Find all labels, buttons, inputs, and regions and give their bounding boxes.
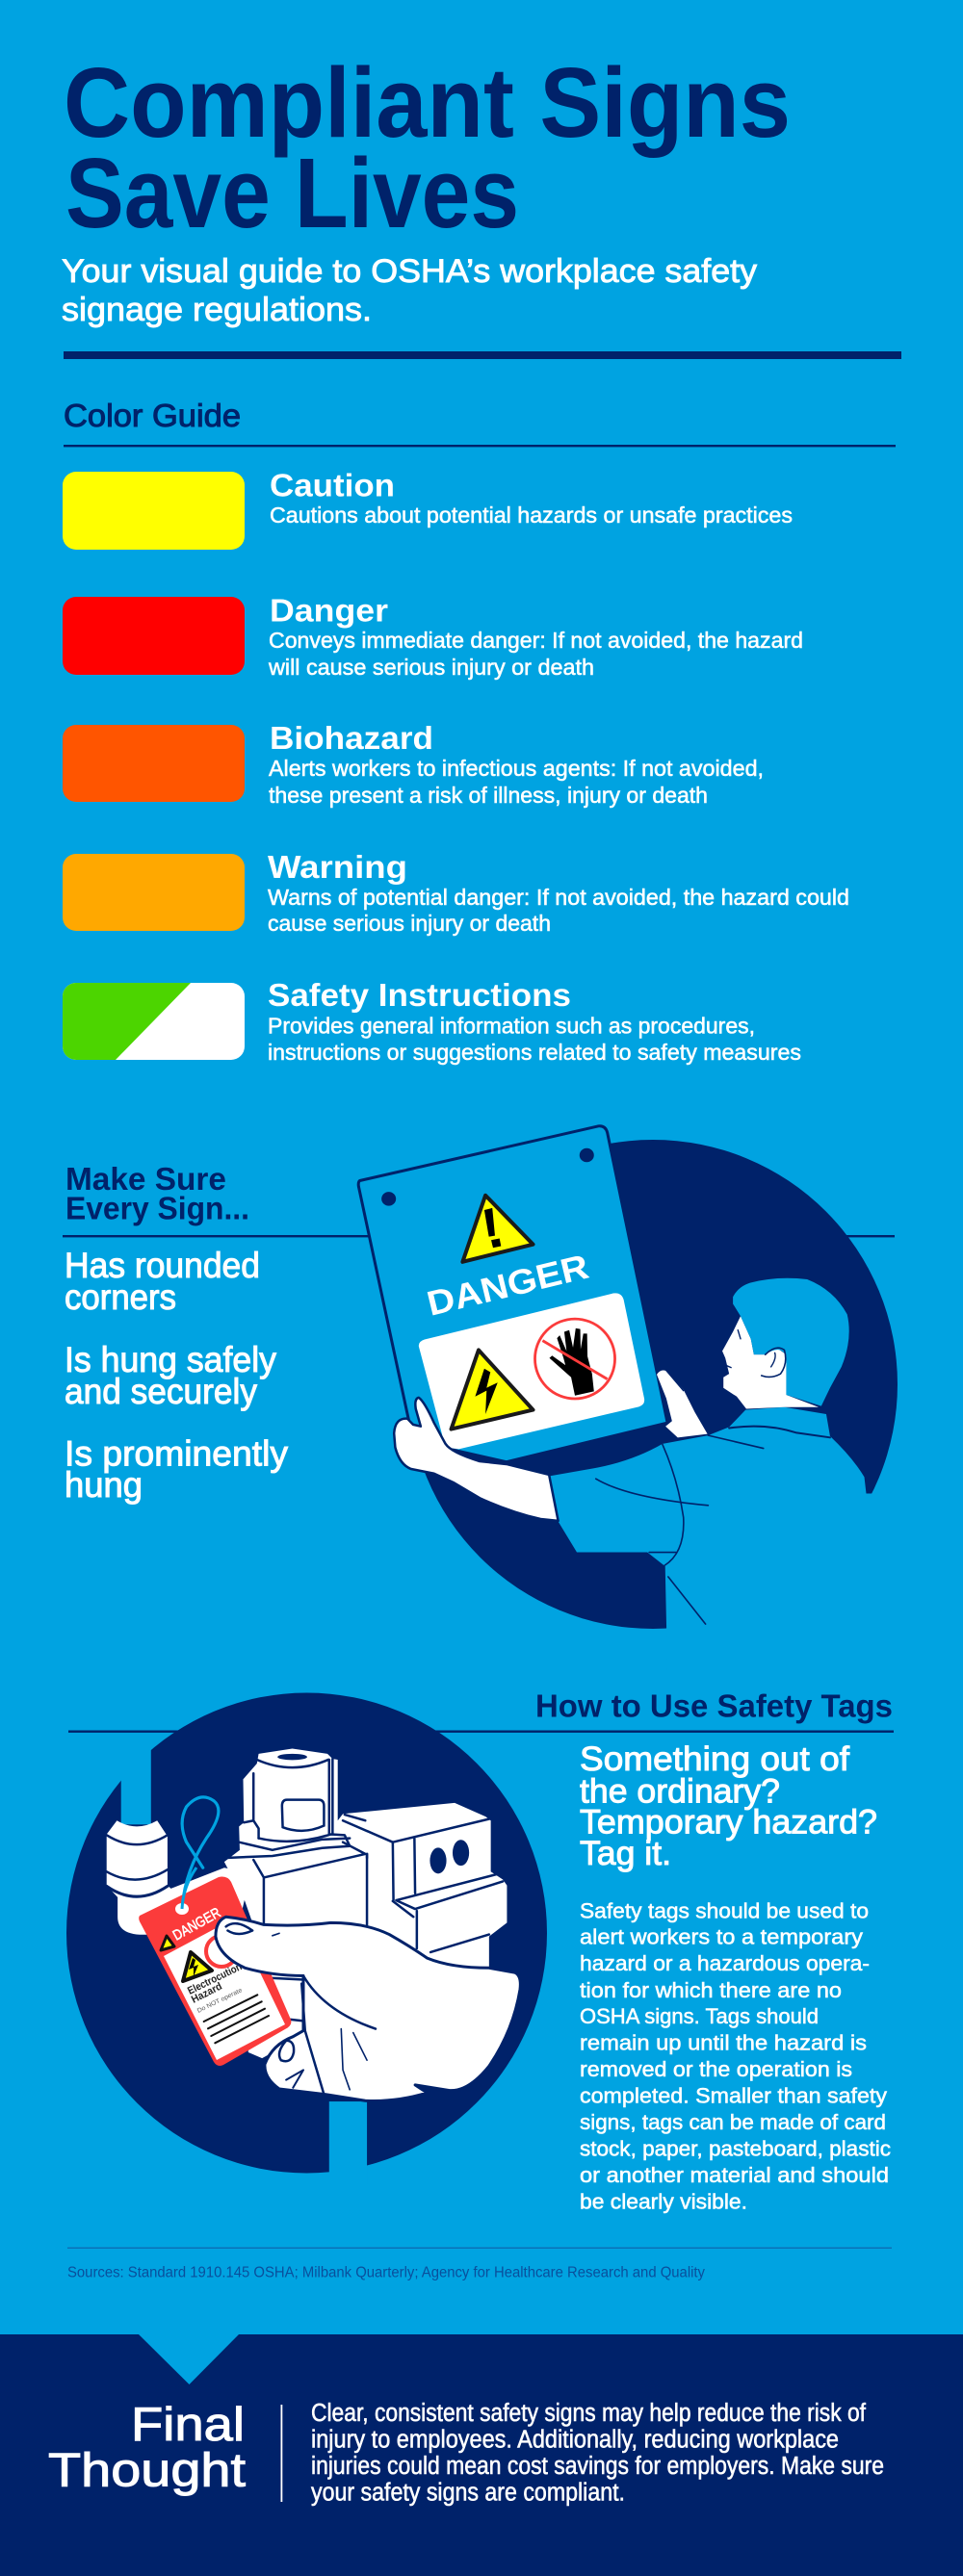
- pipe fitting: [107, 1820, 247, 1935]
- tag text: Hazard: [190, 1981, 224, 2006]
- heading: make sure every sign: [65, 1161, 249, 1226]
- tag text: Electrocution: [186, 1961, 244, 1997]
- tags body text: signs, tags can be made of card: [580, 2110, 886, 2134]
- shirt fold lines: [596, 1427, 830, 1624]
- checklist text: Is hung safely: [65, 1340, 276, 1379]
- tags body text: completed. Smaller than safety: [580, 2084, 888, 2108]
- checklist text: and securely: [65, 1372, 257, 1411]
- tag prohibition icon: [206, 1936, 237, 1967]
- final thought text: Clear, consistent safety signs may help reduce the risk of: [311, 2400, 867, 2427]
- safety instructions row: instructions or suggestions related to safety measures: [268, 1040, 801, 1065]
- danger row: will cause serious injury or death: [268, 655, 594, 680]
- tag text: [186, 1961, 244, 2015]
- tags headline: Something out of: [580, 1740, 849, 1778]
- sources: Sources: Standard 1910.145 OSHA; Milbank Quarterly; Agency for Healthcare Research and Quality: [67, 2265, 705, 2281]
- title: Save Lives: [65, 138, 519, 248]
- final thought text: injuries could mean cost savings for employers. Make sure: [311, 2453, 884, 2480]
- final thought heading: Final: [131, 2399, 245, 2451]
- danger row: Conveys immediate danger: If not avoided, the hazard: [269, 628, 803, 653]
- checklist text: Is prominently: [65, 1434, 289, 1474]
- illustration: worker holding danger sign: [358, 1126, 963, 1675]
- tags body text: tion for which there are no: [580, 1978, 842, 2002]
- sign board: [358, 1126, 667, 1462]
- tag mini warning: [161, 1936, 174, 1950]
- no-touch icon: [534, 1319, 615, 1399]
- tags body text: remain up until the hazard is: [580, 2031, 867, 2055]
- biohazard row: these present a risk of illness, injury or death: [269, 783, 708, 808]
- heading: how to use safety tags: How to Use Safety Tags: [535, 1688, 893, 1723]
- title: [64, 47, 791, 248]
- title: Compliant Signs: [64, 47, 791, 158]
- tags body text: hazard or a hazardous opera-: [580, 1951, 870, 1975]
- worker head: [722, 1278, 849, 1409]
- heading: color guide: Color Guide: [64, 398, 241, 433]
- subtitle: signage regulations.: [62, 292, 372, 328]
- tags body text: removed or the operation is: [580, 2057, 852, 2081]
- warning row: [63, 849, 849, 936]
- safety instructions row: Safety Instructions: [268, 977, 571, 1013]
- heading: make sure every sign: Every Sign...: [65, 1191, 249, 1226]
- tag heading: DANGER: [170, 1904, 223, 1944]
- heading: make sure every sign: Make Sure: [65, 1161, 226, 1197]
- tags body text: alert workers to a temporary: [580, 1925, 864, 1949]
- biohazard row: Alerts workers to infectious agents: If not avoided,: [269, 756, 764, 781]
- machine body: [224, 1749, 507, 1968]
- sign holes: [381, 1148, 594, 1206]
- safety tag: [139, 1868, 291, 2066]
- tag electric icon: [183, 1952, 212, 1981]
- pipe cutouts: [121, 1734, 367, 2184]
- checklist text: [65, 1246, 289, 1505]
- tags headline: [580, 1740, 877, 1872]
- panel: color guide: [63, 468, 849, 1065]
- final thought text: your safety signs are compliant.: [311, 2480, 625, 2507]
- tags body text: Safety tags should be used to: [580, 1898, 869, 1922]
- final thought text: injury to employees. Additionally, reducing workplace: [311, 2427, 839, 2454]
- warning row: cause serious injury or death: [268, 911, 551, 936]
- tag string: [182, 1797, 219, 1906]
- checklist text: hung: [65, 1465, 143, 1505]
- tags headline: the ordinary?: [580, 1772, 780, 1810]
- tags body text: stock, paper, pasteboard, plastic: [580, 2137, 891, 2160]
- final thought heading: Thought: [48, 2445, 246, 2497]
- notch: [139, 2334, 239, 2384]
- footer panel: [0, 2334, 963, 2576]
- tag lines: [204, 1995, 269, 2043]
- warning row: Warning: [268, 849, 407, 885]
- danger row: Danger: [270, 593, 388, 628]
- safety instructions row: Provides general information such as procedures,: [268, 1013, 755, 1038]
- caution row: Caution: [270, 468, 395, 502]
- hand detail lines: [226, 1923, 376, 2095]
- danger sign label: DANGER: [423, 1247, 592, 1324]
- tags body text: OSHA signs. Tags should: [580, 2004, 819, 2028]
- safety instructions row: [63, 977, 801, 1065]
- subtitle: [62, 253, 757, 328]
- worker body: [550, 1407, 963, 1675]
- final thought heading: [48, 2399, 246, 2497]
- biohazard row: Biohazard: [270, 720, 433, 756]
- caution row: Cautions about potential hazards or unsafe practices: [270, 502, 793, 528]
- warning row: Warns of potential danger: If not avoided, the hazard could: [268, 885, 849, 910]
- checklist text: Has rounded: [65, 1246, 260, 1285]
- tags body text: [580, 1898, 891, 2214]
- electric hazard icon: [452, 1350, 534, 1430]
- hand: [216, 1917, 520, 2100]
- tags body text: or another material and should: [580, 2163, 889, 2187]
- tag text: Do NOT operate: [196, 1987, 244, 2015]
- right hand: [657, 1371, 708, 1437]
- warning triangle icon: [462, 1196, 534, 1262]
- biohazard row: [63, 720, 764, 808]
- tags headline: Temporary hazard?: [580, 1804, 877, 1842]
- subtitle: Your visual guide to OSHA’s workplace safety: [62, 253, 757, 290]
- final thought text: [311, 2400, 884, 2507]
- palm behind tag: [245, 1964, 305, 2058]
- tags body text: be clearly visible.: [580, 2190, 747, 2214]
- left hand and arm: [394, 1398, 559, 1521]
- illustration: hand holding safety tag on equipment: [66, 1692, 547, 2184]
- danger row: [63, 593, 803, 680]
- checklist text: corners: [65, 1277, 176, 1317]
- white sign panel: [419, 1293, 644, 1449]
- machine detail lines: [226, 1754, 503, 1952]
- caution row: [63, 468, 793, 550]
- tags headline: Tag it.: [580, 1835, 671, 1872]
